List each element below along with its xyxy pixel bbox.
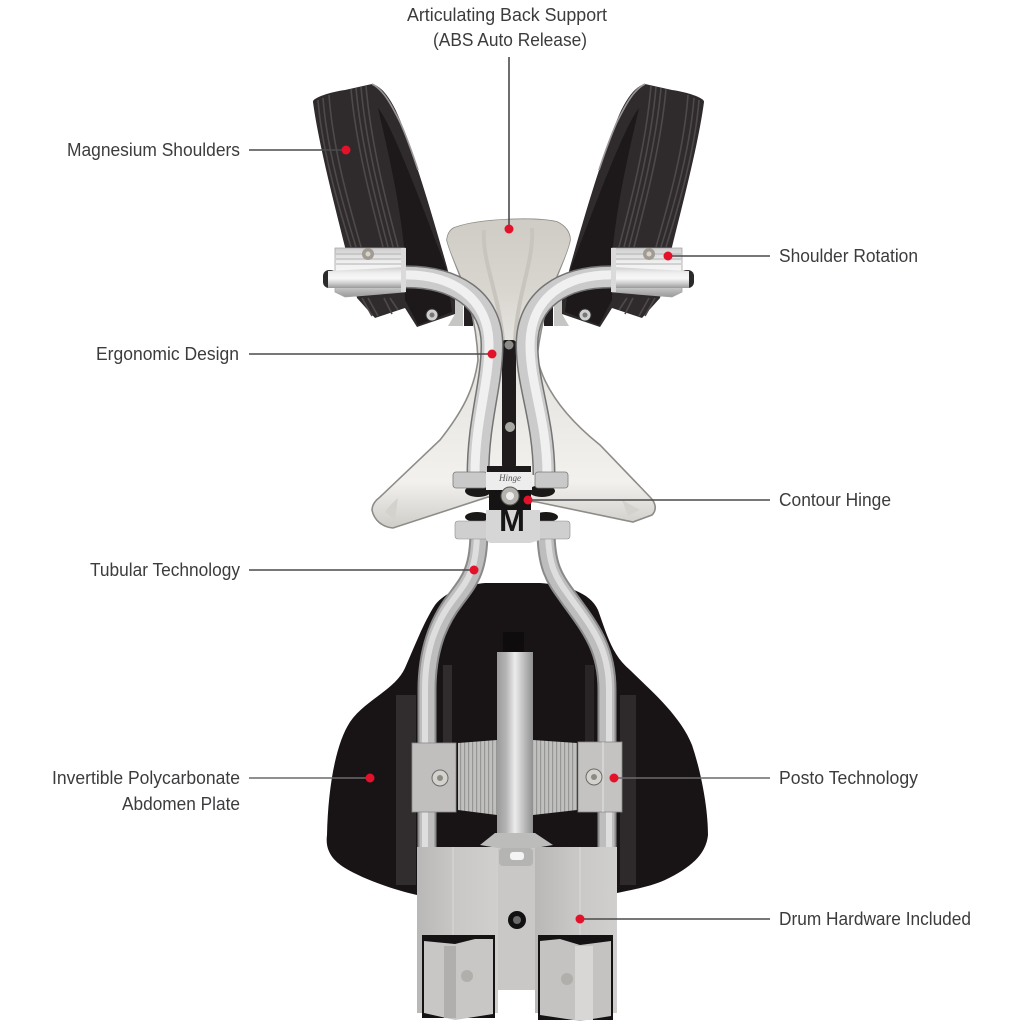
spine strap	[502, 340, 516, 468]
callout: Invertible Polycarbonate Abdomen Plate	[52, 768, 374, 814]
left shoulder pad	[313, 84, 473, 327]
hinge M logo: M	[499, 503, 525, 538]
back plate with wings	[372, 219, 655, 528]
abdomen plate	[327, 583, 708, 895]
callout: Contour Hinge: Contour Hinge	[779, 490, 891, 510]
contour hinge	[453, 466, 570, 543]
callout: Drum Hardware Included: Drum Hardware Included	[779, 909, 971, 929]
right shoulder pad	[544, 84, 704, 327]
left shoulder clamp	[323, 248, 438, 321]
lower tubes	[425, 530, 609, 850]
callout: Tubular Technology: Tubular Technology	[90, 560, 240, 580]
panel: harness photo	[313, 84, 708, 1021]
callout: Magnesium Shoulders	[67, 140, 350, 160]
drum hardware block	[417, 833, 617, 1013]
upper tubes	[400, 275, 617, 475]
callout: Posto Technology	[610, 768, 918, 788]
callout: Articulating Back Support: Articulating Back Support	[407, 5, 607, 25]
center post	[497, 632, 533, 834]
callout: Articulating Back Support	[407, 5, 607, 234]
callout: Shoulder Rotation: Shoulder Rotation	[779, 246, 918, 266]
right shoulder clamp	[579, 248, 694, 321]
callout: Contour Hinge	[524, 490, 891, 510]
callout: Invertible Polycarbonate Abdomen Plate: Abdomen Plate	[122, 794, 240, 814]
bottom clips	[422, 935, 613, 1021]
hinge wordmark: Hinge	[498, 473, 521, 483]
callout: Articulating Back Support: (ABS Auto Release)	[433, 30, 587, 50]
callout: Invertible Polycarbonate Abdomen Plate: Invertible Polycarbonate	[52, 768, 240, 788]
callout: Tubular Technology	[90, 560, 478, 580]
callout: Drum Hardware Included	[576, 909, 971, 929]
callout: Ergonomic Design: Ergonomic Design	[96, 344, 239, 364]
callout: Ergonomic Design	[96, 344, 496, 364]
callout: Magnesium Shoulders: Magnesium Shoulders	[67, 140, 240, 160]
callout: Shoulder Rotation	[664, 246, 918, 266]
callout: Posto Technology: Posto Technology	[779, 768, 918, 788]
ribbed post brackets	[412, 740, 622, 815]
